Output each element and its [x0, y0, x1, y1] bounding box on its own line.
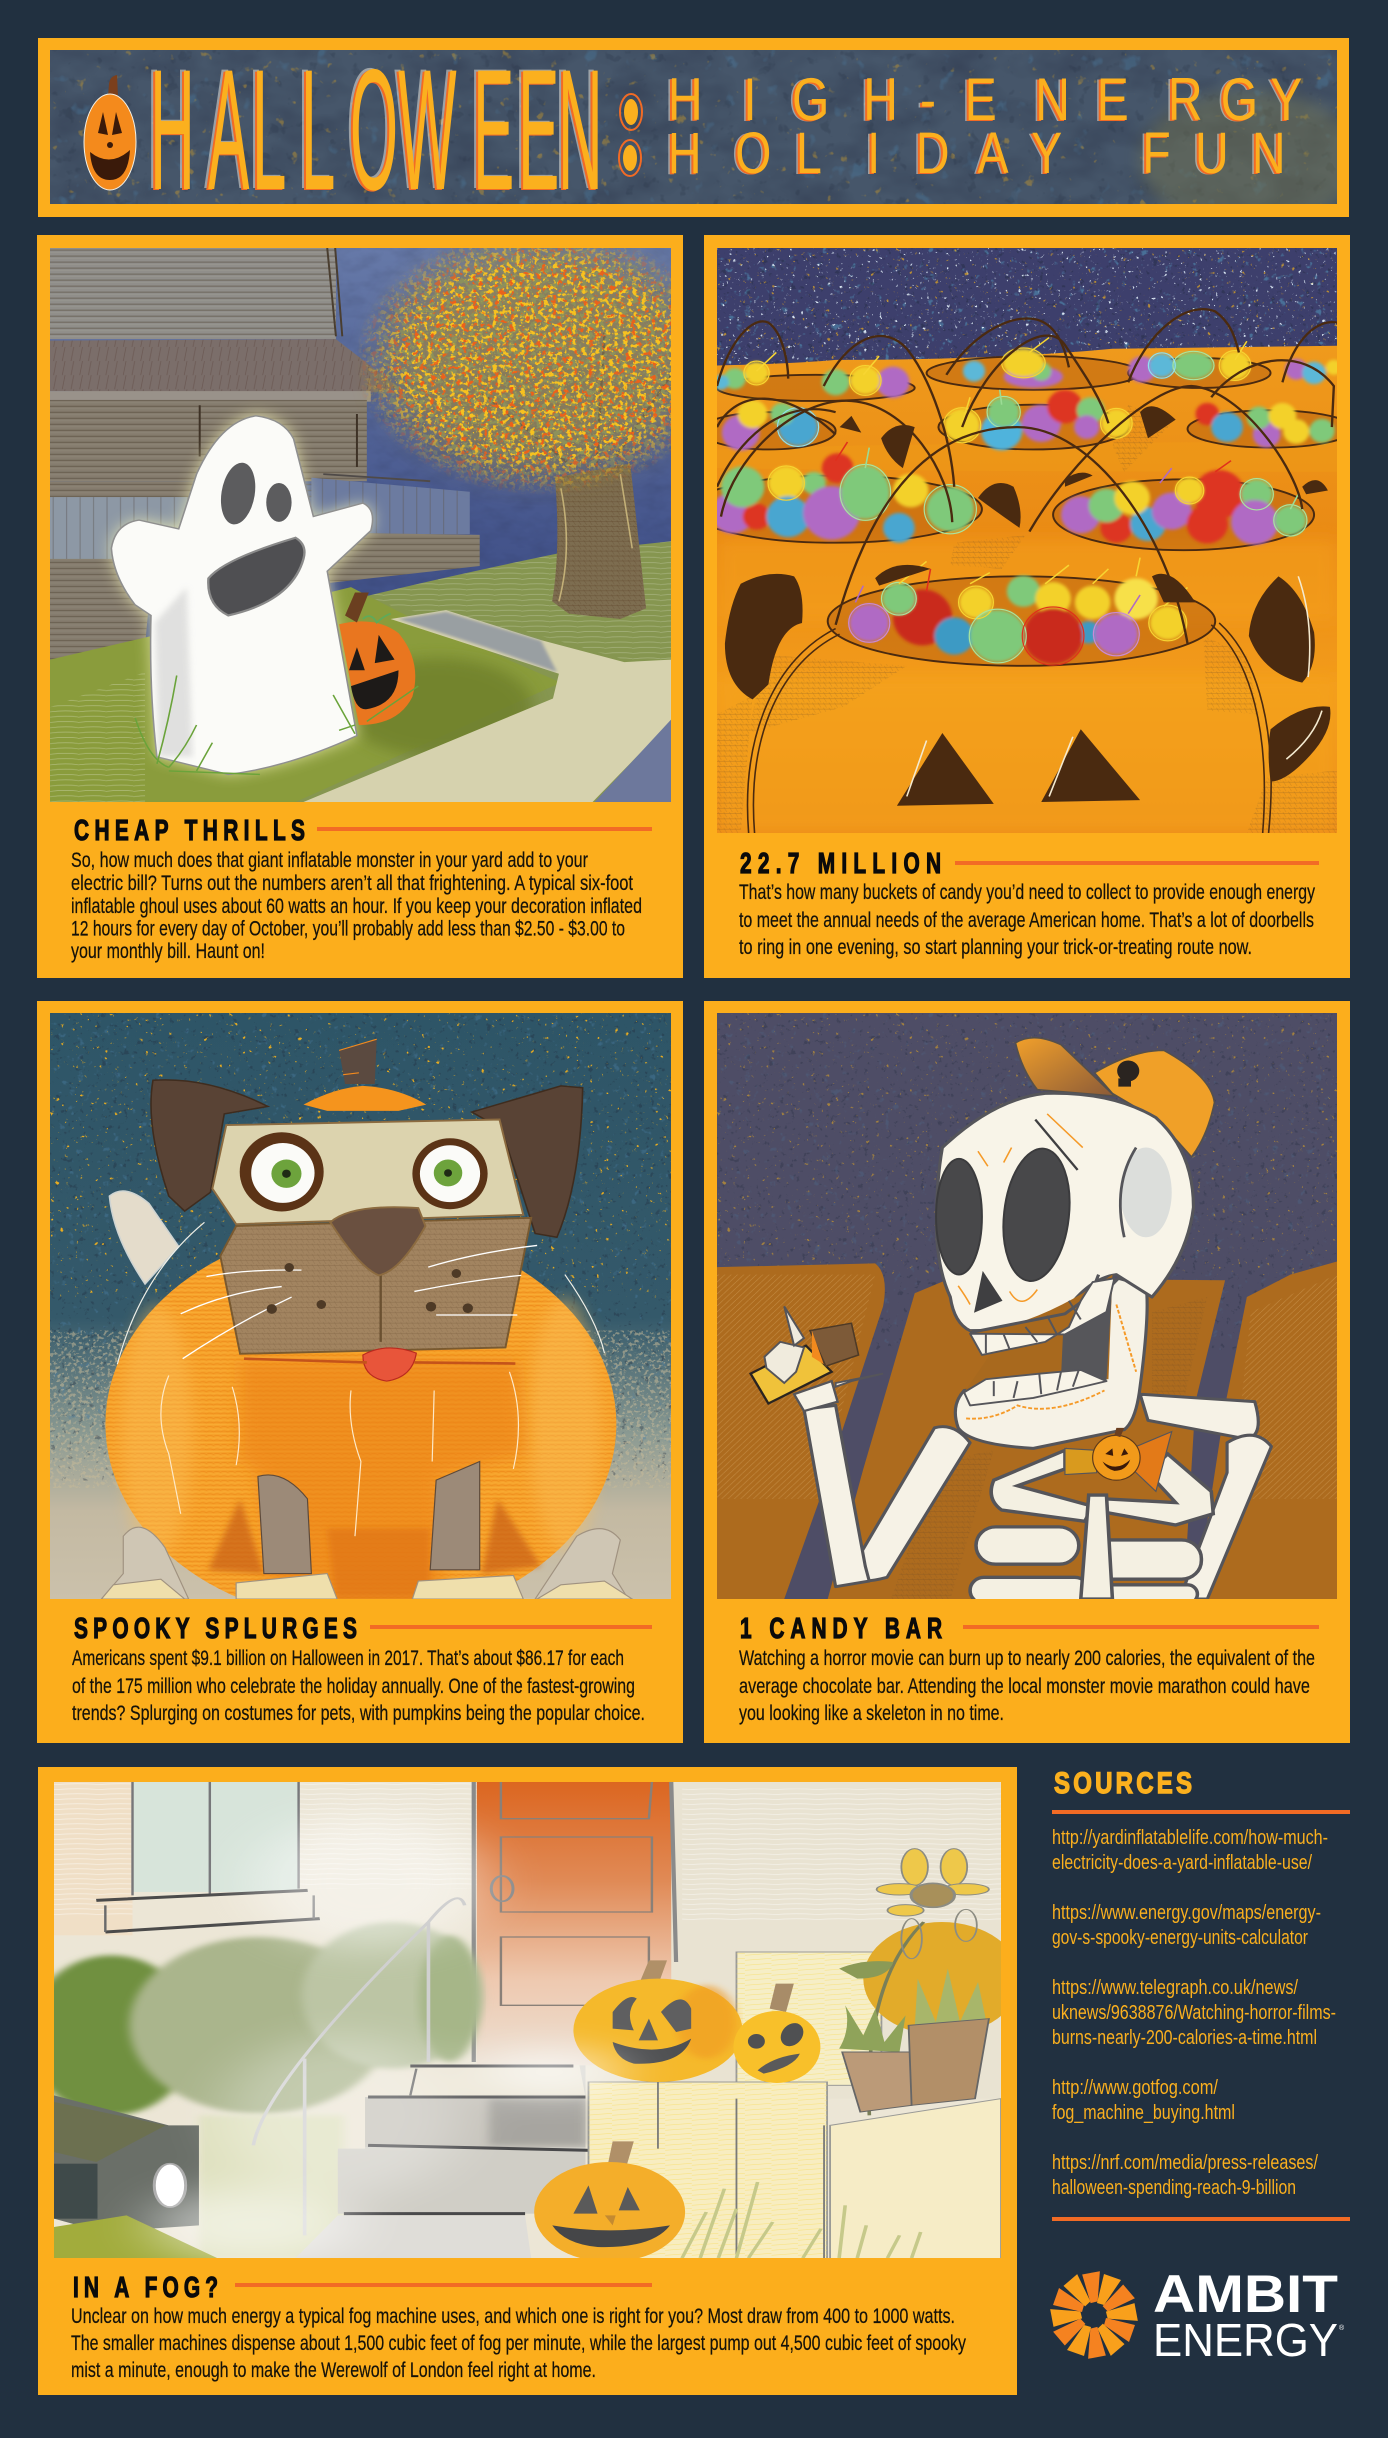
lower left pale grass: [199, 2115, 344, 2258]
body text: Unclear on how much energy a typical fog machine uses, and which one is right for you? Most draw from 400 to 1000 watts.: [71, 2304, 955, 2328]
tree foliage speckles: [359, 248, 692, 502]
door: [474, 1782, 676, 2065]
sidewalk: [303, 610, 671, 802]
sources rule top: [1052, 1810, 1350, 1814]
bow tie with pumpkin: [1065, 1428, 1172, 1491]
panel: spooky splurges: [37, 1001, 683, 1743]
body text: of the 175 million who celebrate the holiday annually. One of the fastest-growing: [72, 1674, 635, 1698]
ribcage: [970, 1450, 1213, 1603]
hand with candy bar: [751, 1306, 883, 1411]
hay boxes: [588, 1952, 1001, 2262]
stem and cap: [303, 1039, 426, 1111]
source links: burns-nearly-200-calories-a-time.html: [1052, 2027, 1317, 2049]
grass: [54, 2182, 921, 2258]
dog legs: [258, 1461, 480, 1574]
dog ears: [151, 1080, 583, 1237]
panel: cheap thrills: [37, 235, 692, 978]
heading rule: [955, 861, 1319, 865]
panel: 22.7 million: [689, 235, 1354, 978]
icon: jack-o-lantern: [84, 75, 136, 190]
window: [96, 1782, 320, 1932]
body text: [71, 2304, 966, 2382]
illustration: foggy porch: [54, 1782, 1001, 2258]
dog nose: [330, 1207, 425, 1275]
body text: inflatable ghoul uses about 60 watts an hour. If you keep your decoration inflated: [71, 894, 642, 918]
title: Halloween: HALLOWEEN: [150, 35, 603, 226]
body text: trends? Splurging on costumes for pets, with pumpkins being the popular choice.: [72, 1701, 645, 1725]
tongue: [363, 1348, 416, 1381]
source links: fog_machine_buying.html: [1052, 2102, 1235, 2124]
body text: [739, 1646, 1315, 1725]
heading rule: [370, 1625, 652, 1629]
muzzle: [181, 1218, 537, 1359]
subtitle line two: HOLIDAY FUN: [668, 121, 1286, 186]
fog overlay upper: [253, 1815, 483, 1949]
source links: [1052, 1827, 1336, 2199]
heading: IN A FOG?: [73, 2272, 218, 2304]
logo: Ambit Energy: ENERGY: [1153, 2314, 1338, 2366]
stair railing: [253, 1898, 465, 2235]
bucket handles: [717, 309, 1337, 643]
heading rule: [317, 827, 652, 831]
source links: halloween-spending-reach-9-billion: [1052, 2177, 1296, 2199]
dark hatching: [717, 405, 1337, 833]
stairs: [296, 2065, 592, 2258]
fog machine: [54, 2095, 199, 2232]
icon: star burst: [1045, 2266, 1143, 2364]
porch pumpkins: [573, 1960, 820, 2083]
heading: CHEAP THRILLS: [74, 815, 305, 847]
header banner: [38, 35, 1360, 230]
pumpkin face: [725, 406, 1330, 806]
body text: [71, 848, 642, 963]
illustration: ghost in the yard: [50, 248, 671, 802]
heading rule: [235, 2283, 652, 2287]
body text: mist a minute, enough to make the Werewolf of London feel right at home.: [71, 2358, 596, 2382]
candy scribble outlines: [744, 348, 1307, 665]
body text: [72, 1646, 645, 1725]
pumpkin outline: [748, 623, 1271, 833]
house: [50, 248, 480, 660]
dog paws: [101, 1527, 632, 1599]
dog eyes: [240, 1132, 488, 1211]
cinema seats: [717, 1262, 1337, 1599]
body text: [739, 880, 1315, 959]
candy wrapper tufts: [757, 338, 1298, 614]
sources column: [1052, 1765, 1350, 2221]
candy: [711, 349, 1342, 664]
logo: Ambit Energy: [1045, 2265, 1345, 2366]
pumpkin body: [105, 1222, 616, 1622]
bucket rims: [689, 356, 1354, 666]
body text: Americans spent $9.1 billion on Halloween in 2017. That’s about $86.17 for each: [72, 1646, 624, 1670]
sources heading: SOURCES: [1054, 1765, 1192, 1800]
body text: So, how much does that giant inflatable monster in your yard add to your: [71, 848, 588, 872]
source links: gov-s-spooky-energy-units-calculator: [1052, 1927, 1308, 1949]
title bullets: [619, 94, 642, 176]
foreground pumpkin: [534, 2141, 685, 2262]
body text: The smaller machines dispense about 1,500 cubic feet of fog per minute, while the largest pump out 4,500 cubic feet of spooky: [71, 2331, 966, 2355]
dog head: [212, 1120, 523, 1224]
fog overlay lower: [151, 2035, 622, 2262]
source links: https://nrf.com/media/press-releases/: [1052, 2152, 1318, 2174]
shrubs: [27, 1922, 483, 2115]
illustration: pug in pumpkin costume: [50, 1013, 671, 1599]
arms: [804, 1394, 1271, 1599]
pumpkin behind ghost: [333, 592, 418, 734]
body text: you looking like a skeleton in no time.: [739, 1701, 1004, 1725]
source links: http://www.gotfog.com/: [1052, 2077, 1218, 2099]
illustration: candy buckets: [717, 248, 1337, 833]
plant pots: [839, 1969, 989, 2112]
wordmark: AMBIT: [1153, 2265, 1338, 2324]
sources rule bottom: [1052, 2217, 1350, 2221]
source links: http://yardinflatablelife.com/how-much-: [1052, 1827, 1328, 1849]
illustration: skeleton at the movies: [717, 1013, 1337, 1599]
cap: [1016, 1038, 1214, 1157]
heading: SPOOKY SPLURGES: [74, 1613, 357, 1645]
tail: [109, 1191, 179, 1284]
heading rule: [963, 1625, 1319, 1629]
skull face: [936, 1114, 1172, 1419]
source links: https://www.energy.gov/maps/energy-: [1052, 1902, 1321, 1924]
body text: electric bill? Turns out the numbers aren’t all that frightening. A typical six-foot: [71, 871, 633, 895]
tree trunk: [552, 464, 646, 619]
lawn: [296, 541, 671, 802]
source links: https://www.telegraph.co.uk/news/: [1052, 1977, 1298, 1999]
panel: in a fog: [27, 1767, 1020, 2395]
body text: your monthly bill. Haunt on!: [71, 939, 265, 963]
body text: 12 hours for every day of October, you’ll probably add less than $2.50 - $3.00 to: [71, 916, 625, 940]
logo: Ambit Energy: ®: [1339, 2324, 1345, 2332]
heading: 1 CANDY BAR: [740, 1613, 942, 1645]
skull: [936, 1093, 1193, 1448]
heading: 22.7 MILLION: [740, 848, 941, 880]
source links: electricity-does-a-yard-inflatable-use/: [1052, 1852, 1312, 1874]
panel: 1 candy bar: [704, 1001, 1350, 1743]
flower and bush: [839, 1849, 1020, 2115]
subtitle line one: HIGH-ENERGY: [668, 66, 1302, 133]
ghost: [111, 414, 373, 774]
